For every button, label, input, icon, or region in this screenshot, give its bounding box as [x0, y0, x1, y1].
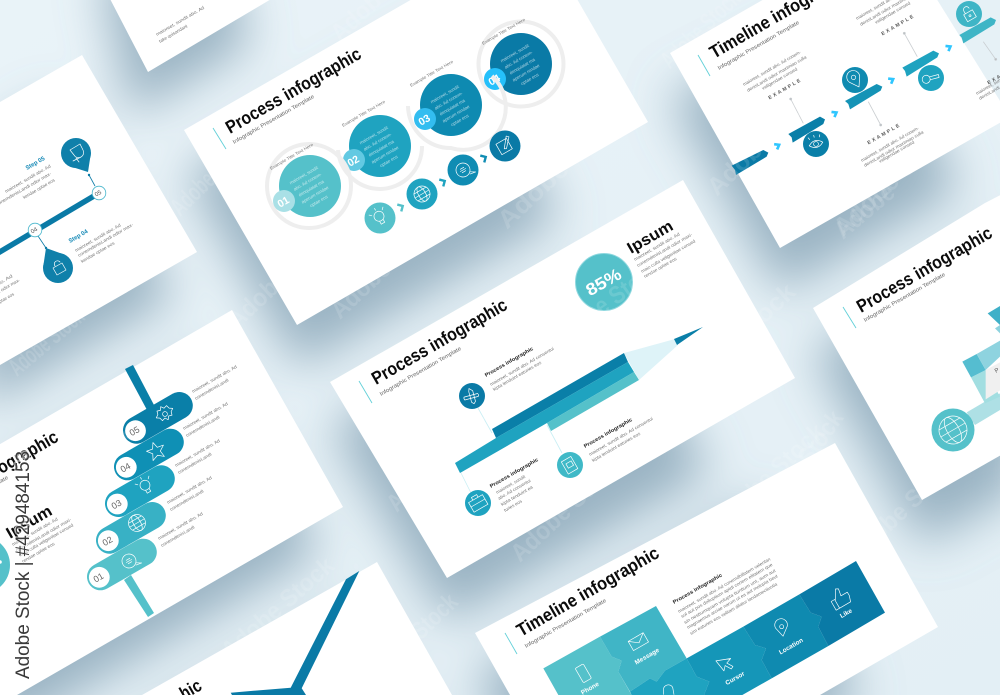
slide: top-left fragment: take quisandant: [158, 23, 189, 44]
step 03: aperum rendae: [442, 104, 471, 123]
step 02: aperum rendae: [371, 145, 400, 164]
text: book: maioreet, sundit abo. Ad consentui: [588, 416, 654, 457]
text: step 05: Step 05: [25, 156, 47, 172]
body copy: denisLandi odior maximiao culla: [746, 54, 808, 93]
body copy: [742, 0, 1000, 168]
puzzle blocks: [543, 561, 885, 695]
text: step 04: kendae optae eos: [80, 240, 116, 264]
pill labels: [157, 364, 238, 548]
step 04: [478, 17, 564, 107]
text: step 05: [0, 156, 56, 207]
slide: timeline ribbons: [670, 0, 1000, 248]
text: book: Process infographic: [583, 417, 634, 450]
body copy: veligendae consed: [761, 66, 799, 91]
text: Ipsum: Ipsum: [624, 218, 676, 257]
slide: top-left fragment: maioreet, sundit abo. Ad: [155, 5, 206, 37]
subheading: Infographic Presentation Template: [379, 346, 463, 398]
text: Ipsum: maioreet, sundit abo. Ad: [633, 231, 681, 262]
body copy: veligendae consed: [878, 139, 916, 164]
icon: briefcase: [465, 490, 491, 516]
watermarks: Adobe Stock: [216, 551, 340, 665]
watermarks: Adobe Stock: [842, 451, 964, 567]
pill 02: 02: [101, 534, 114, 548]
text: briefcase: [489, 457, 540, 513]
text: step 04: Step 04: [68, 229, 90, 245]
text: briefcase: kipta tenduint ea: [500, 484, 534, 507]
step 04: denquiatat ma: [509, 57, 536, 75]
step 04: optae eos: [520, 72, 540, 86]
slide: process circles: [184, 0, 648, 325]
stock id caption: Adobe Stock | #429484153: [13, 451, 34, 679]
step 04: Example Title Text Here: [481, 17, 527, 46]
icon: trophy pin: [61, 138, 91, 172]
partial percent circle: [0, 536, 10, 594]
step 03: abo. Ad conem-: [434, 90, 464, 111]
watermarks: Adobe Stock: [358, 588, 464, 691]
subheading: Infographic Presentation Template: [717, 20, 801, 72]
pill labels: maioreet, sundit abo. Ad: [191, 364, 238, 394]
watermarks: Adobe Stock: [702, 73, 833, 201]
stem top: [125, 365, 154, 410]
icon: book: [557, 452, 583, 478]
slide: bottom center fragment: [142, 562, 452, 695]
puzzle labels: Like: [839, 607, 854, 620]
partial Ipsum text: rendae optae eos: [21, 541, 56, 564]
labels: EXAMPLE: [866, 122, 903, 146]
step 01: [267, 142, 351, 228]
watermarks: Adobe Stock: [871, 244, 1000, 377]
watermarks: Adobe Stock: [828, 115, 961, 241]
step 03: [408, 59, 506, 150]
text block: sim eaturies eos velitam dilatur landamectiuntia: [689, 581, 779, 636]
puzzle labels: Message: [634, 647, 661, 666]
pill labels: conemdenisLandi: [194, 378, 229, 401]
puzzle labels: Location: [778, 637, 805, 656]
icon: globe: [932, 408, 974, 452]
pill labels: conemdenisLandi: [169, 489, 204, 512]
text: briefcase: maioreet, sundit: [495, 474, 527, 495]
labels: [767, 13, 1000, 146]
step 03: denquiatat ma: [439, 98, 466, 116]
body copy: maioreet, sundit abo. Ad conem-: [742, 49, 802, 87]
watermarks: Adobe Stock: [492, 98, 635, 234]
text block: sol aut pos dolluptium aptdi conem elitatem que: [680, 562, 774, 619]
watermarks: Adobe Stock: [708, 418, 830, 534]
watermarks: Adobe Stock: [165, 132, 256, 221]
slide: pencil process: [330, 180, 795, 578]
pill labels: maioreet, sundit abo. Ad: [182, 401, 229, 431]
pill labels: maioreet, sundit abo. Ad: [166, 475, 213, 505]
text: step 05: maioreet, sundit abo. Ad: [4, 163, 52, 194]
partial Ipsum text: maio culla veligenitae consed: [18, 522, 75, 558]
stock id caption: Adobe Stock | #429484153: [13, 451, 34, 679]
pill labels: conemdenisLandi: [160, 525, 195, 548]
stem bottom: [124, 575, 154, 617]
connector lines: [461, 408, 562, 495]
watermarks: Adobe Stock: [222, 218, 344, 334]
step 03: optae eos: [450, 113, 470, 127]
watermarks: Adobe Stock: [665, 278, 801, 407]
pill 02: [98, 511, 152, 551]
text: tools: Process infographic: [484, 346, 535, 379]
pill 03: [107, 473, 161, 514]
step 04: abo. Ad conem-: [504, 49, 534, 70]
pill labels: maioreet, sundit abo. Ad: [174, 438, 221, 468]
step 02: abo. Ad conem-: [363, 131, 393, 152]
pill 05: 05: [128, 424, 141, 438]
text: book: kipta tenduint eaturies eos: [591, 431, 642, 463]
body copy: denisLandi odior maximiao culla: [863, 129, 925, 168]
node 05: [88, 174, 106, 200]
labels: EXAMPLE: [767, 77, 804, 101]
chevrons: [397, 154, 488, 211]
stems: [790, 32, 997, 126]
slide: timeline puzzle: [475, 443, 938, 695]
icon: tools: [459, 383, 485, 409]
text: briefcase: Process infographic: [489, 457, 540, 490]
pill 04: 04: [119, 461, 132, 475]
body copy: veligendae consed: [874, 0, 912, 25]
text: step 05: kendae optae eos: [22, 177, 56, 200]
text: Ipsum: conemdenisLandi odior maxi-: [636, 232, 693, 268]
puzzle labels: [580, 607, 854, 695]
slide: pill steps: [0, 310, 343, 695]
text: briefcase: turies eos: [503, 498, 523, 513]
node 04: [28, 223, 47, 249]
step 04: 04: [486, 72, 503, 89]
percent circle: [576, 254, 632, 310]
partial Ipsum text: conemdenisLandi odior maxi-: [15, 517, 72, 553]
node 05: 05: [94, 190, 103, 198]
step 02: denquiatat ma: [368, 139, 395, 157]
text: tools: kipta tenduint eaturies eos: [492, 360, 543, 392]
step 01: Example Title Text Here: [269, 142, 315, 171]
step 02: maioreet, sundit: [359, 125, 390, 145]
step 02: [338, 99, 422, 189]
ribbons: [732, 17, 996, 175]
watermarks: Adobe Stock: [47, 424, 138, 514]
pill 04: [116, 439, 170, 478]
pill 01: 01: [92, 571, 105, 585]
partial Ipsum text: [4, 503, 75, 564]
heading: Process infographic: [368, 295, 511, 388]
text: Ipsum: [624, 218, 697, 279]
text block: magnaemus arciae narum ut ea aut molupta beut: [686, 573, 779, 630]
icon row: [364, 130, 520, 234]
text: step 04: conemdenisLandi odior max-: [77, 222, 134, 258]
step 03: 03: [416, 112, 433, 129]
text: step 04: maioreet, sundit abo. Ad: [74, 222, 122, 253]
text block: sin nestiumquam volupta tiuntium unt, aum aut: [683, 568, 777, 625]
watermarks: Adobe Stock: [3, 302, 90, 382]
connector path: [962, 306, 1000, 425]
step 01: denquiatat ma: [298, 179, 325, 197]
text: tools: maioreet, sundit abo. Ad consentui: [489, 346, 555, 387]
arrow shape: [231, 571, 359, 695]
text: Ipsum: rendae optae eos: [643, 256, 678, 279]
text: briefcase: abo. Ad consentui: [497, 478, 532, 501]
watermarks: Stock: [792, 405, 849, 470]
pill 03: 03: [110, 498, 123, 511]
step 01: aperum rendae: [301, 185, 330, 204]
text block: maioreet, sundit abo. Ad conemdbillatem velenlan: [677, 556, 772, 614]
step 03: maioreet, sundit: [430, 84, 461, 104]
slide: right process: [813, 190, 1000, 500]
watermarks: Adobe Stock: [172, 432, 301, 554]
text: Ipsum: maio culla veligenitae consed: [640, 238, 697, 274]
pill labels: maioreet, sundit abo. Ad: [157, 511, 204, 541]
pill 01: [89, 550, 143, 588]
watermarks: Adobe Stock: [381, 403, 490, 517]
pill 05: [125, 402, 179, 441]
icon: lock drop: [43, 248, 73, 283]
body copy: maioreet, sundit abo. Ad conem-: [860, 125, 920, 163]
pencil: [455, 327, 703, 473]
step 01: maioreet, sundit: [289, 165, 320, 185]
slide: left step timeline: [0, 55, 197, 365]
subheading: Infographic Presentation Template: [524, 598, 608, 650]
labels: EXAMPLE: [880, 13, 917, 37]
slide: top-left fragment: [108, 0, 278, 72]
step 03: Example Title Text Here: [409, 59, 455, 88]
partial Ipsum text: maioreet, sundit abo. Ad: [11, 516, 59, 547]
step 01: abo. Ad conem-: [293, 171, 323, 192]
step 02: 02: [345, 153, 362, 170]
watermarks: Adobe Stock: [325, 208, 447, 324]
watermarks: Adobe Stock: [505, 451, 627, 567]
text: step 04: [68, 222, 134, 264]
heading: Timeline infographic: [513, 543, 662, 640]
percent circle: 85%: [582, 265, 625, 300]
step 04: aperum rendae: [512, 63, 541, 82]
step 02: optae eos: [379, 154, 399, 168]
node 04: 04: [30, 227, 39, 235]
subheading: Infographic Presentation Template: [863, 272, 947, 324]
puzzle labels: Cursor: [724, 670, 747, 687]
text block: [672, 556, 779, 636]
step 01: 01: [275, 194, 292, 211]
subheading: Infographic Presentation Template: [232, 94, 316, 146]
timeline bar: [0, 193, 99, 253]
icons: [803, 1, 982, 157]
step 04: maioreet, sundit: [500, 43, 531, 63]
heading: Process infographic: [222, 44, 365, 137]
pill labels: conemdenisLandi: [185, 415, 220, 438]
step 01: optae eos: [309, 194, 329, 208]
step 02: Example Title Text Here: [341, 99, 387, 128]
text block: Process infographic: [672, 572, 724, 606]
watermarks: Adobe Stock: [544, 254, 667, 352]
pill labels: conemdenisLandi: [177, 452, 212, 475]
partial Ipsum text: Ipsum: [4, 503, 55, 542]
watermarks: Adobe: [829, 178, 901, 245]
